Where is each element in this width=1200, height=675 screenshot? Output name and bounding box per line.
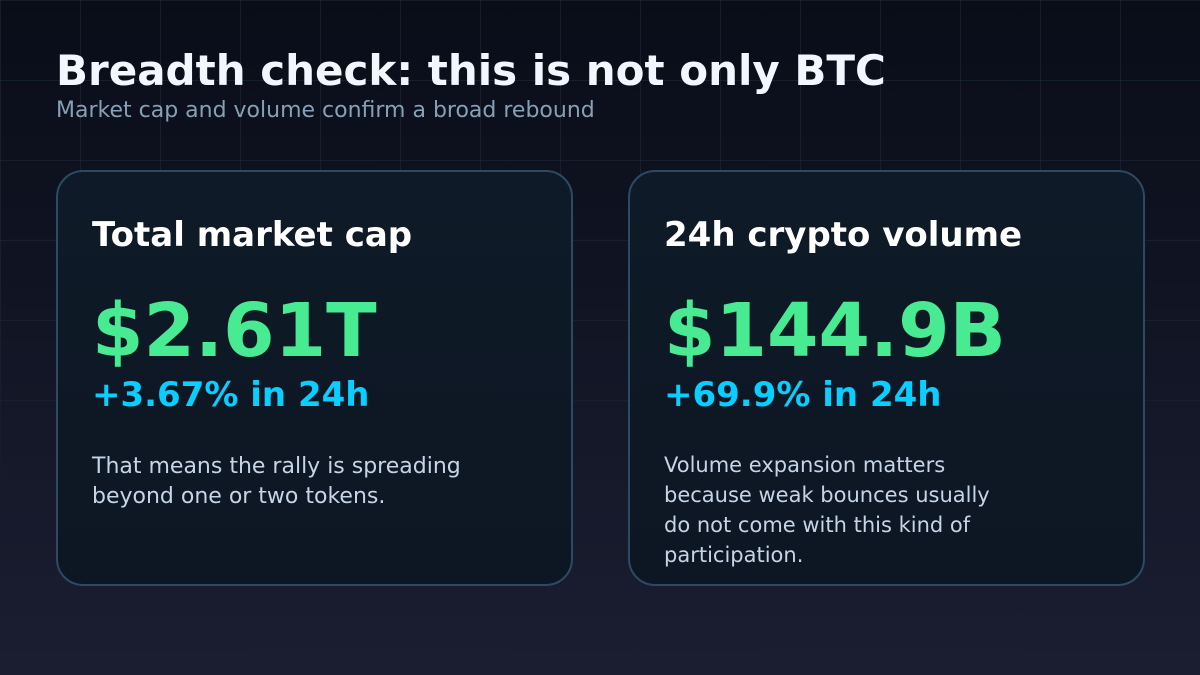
title: Breadth check: this is not only BTC — [56, 46, 886, 95]
panel: total market cap — [56, 170, 573, 586]
market cap explanation: beyond one or two tokens. — [92, 484, 385, 509]
market cap explanation: That means the rally is spreading — [92, 454, 461, 479]
panel heading: 24h crypto volume — [664, 215, 1022, 255]
market cap value: $2.61T — [92, 288, 377, 374]
subtitle: Market cap and volume confirm a broad rebound — [56, 98, 595, 123]
market cap change: +3.67% in 24h — [92, 375, 370, 415]
volume explanation — [664, 453, 990, 567]
panel: 24h crypto volume — [628, 170, 1145, 586]
panel heading: Total market cap — [92, 215, 412, 255]
market cap explanation — [92, 454, 461, 509]
volume explanation: Volume expansion matters — [664, 453, 945, 477]
volume explanation: do not come with this kind of — [664, 513, 970, 537]
volume explanation: participation. — [664, 543, 803, 567]
volume explanation: because weak bounces usually — [664, 483, 990, 507]
volume value: $144.9B — [664, 288, 1006, 374]
volume change: +69.9% in 24h — [664, 375, 942, 415]
